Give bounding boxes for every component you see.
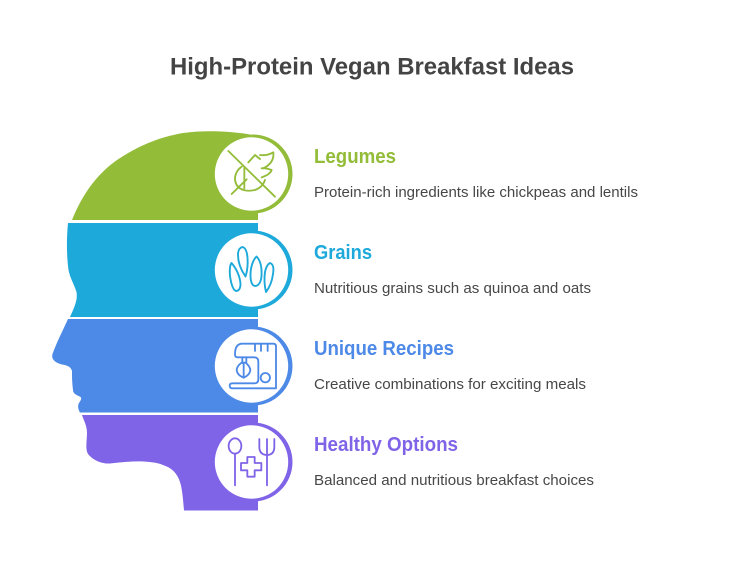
icon: grains (215, 233, 288, 307)
icon: stand mixer (215, 329, 288, 403)
title: High-Protein Vegan Breakfast Ideas (170, 54, 574, 80)
head segment: healthy options (82, 415, 292, 510)
head segment: grains (67, 223, 292, 317)
text block: unique recipes (314, 338, 586, 393)
text block: legumes: Protein-rich ingredients like chickpeas and lentils (314, 185, 638, 201)
icon: crossed-out leaf and wheat (215, 137, 288, 211)
text block: healthy options (314, 434, 594, 489)
text block: grains (314, 242, 591, 297)
text block: unique recipes: Creative combinations for exciting meals (314, 377, 586, 393)
icon: spoon, fork and health cross (215, 425, 288, 499)
text block: healthy options: Healthy Options (314, 434, 458, 456)
text block: legumes (314, 146, 638, 201)
text block: legumes: Legumes (314, 146, 396, 168)
text block: unique recipes: Unique Recipes (314, 338, 454, 360)
text block: grains: Grains (314, 242, 372, 264)
head segment: legumes (72, 131, 292, 220)
text block: healthy options: Balanced and nutritious breakfast choices (314, 473, 594, 489)
text block: grains: Nutritious grains such as quinoa and oats (314, 281, 591, 297)
head segment: unique recipes (52, 319, 293, 412)
